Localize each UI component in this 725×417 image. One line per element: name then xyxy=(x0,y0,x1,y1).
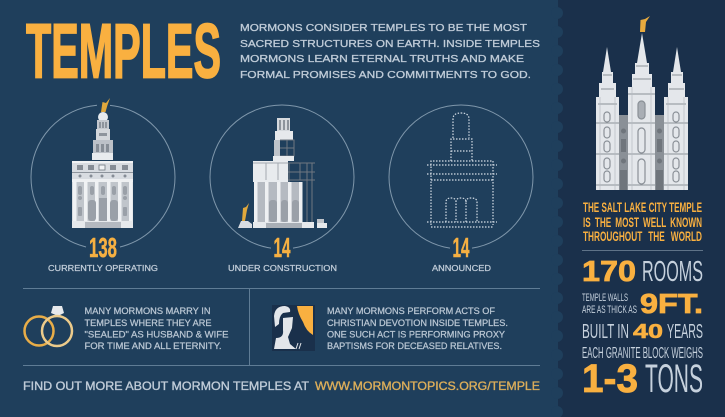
title: TEMPLES xyxy=(26,8,221,94)
text: baptisms: MANY MORMONS PERFORM ACTS OF xyxy=(327,306,496,316)
icon: wedding rings xyxy=(24,306,72,346)
intro text: MORMONS CONSIDER TEMPLES TO BE THE MOST xyxy=(240,22,528,34)
icon: dotted temple outline xyxy=(427,113,497,227)
intro text: FORMAL PROMISES AND COMMITMENTS TO GOD. xyxy=(240,69,531,81)
icon: Salt Lake City temple xyxy=(596,16,688,190)
stat: years built xyxy=(582,321,703,343)
stat: years built: 40 xyxy=(633,321,663,343)
count: 14 xyxy=(274,232,291,263)
panel: baptisms xyxy=(272,305,508,351)
stat: granite block weight xyxy=(582,345,703,401)
intro text: SACRED STRUCTURES ON EARTH. INSIDE TEMPLES xyxy=(240,38,540,50)
stat: granite block weight: 1-3 xyxy=(582,357,638,401)
sidebar stats xyxy=(582,256,703,401)
circle outline xyxy=(31,105,175,247)
stat: rooms xyxy=(582,256,703,288)
text: baptisms: CHRISTIAN DEVOTION INSIDE TEMPLES. xyxy=(327,318,508,328)
count: 138 xyxy=(89,232,117,263)
panel: currently operating xyxy=(31,98,175,273)
label: CURRENTLY OPERATING xyxy=(48,264,158,273)
footer call to action: WWW.MORMONTOPICS.ORG/TEMPLE xyxy=(315,379,540,393)
stat: rooms: 170 xyxy=(582,256,636,288)
stat: wall thickness: TEMPLE WALLS xyxy=(582,292,628,304)
stat: wall thickness xyxy=(582,288,703,319)
footer call to action xyxy=(23,379,540,393)
text: marriage xyxy=(84,306,228,351)
text: baptisms xyxy=(327,306,508,351)
panel: marriage xyxy=(24,306,228,351)
panel: announced xyxy=(389,105,533,273)
count: 14 xyxy=(452,232,470,263)
text: marriage: FOR TIME AND ALL ETERNITY. xyxy=(84,341,222,351)
label: ANNOUNCED xyxy=(432,264,491,273)
intro text: MORMONS LEARN ETERNAL TRUTHS AND MAKE xyxy=(240,53,524,65)
sidebar panel with scalloped edge xyxy=(551,0,725,417)
stat: wall thickness: 9FT. xyxy=(640,288,703,319)
text: baptisms: BAPTISMS FOR DECEASED RELATIVES. xyxy=(327,341,502,351)
stat: wall thickness: ARE AS THICK AS xyxy=(582,304,637,316)
text: marriage: TEMPLES WHERE THEY ARE xyxy=(84,318,212,328)
panel: under construction xyxy=(210,105,354,273)
circle outline xyxy=(389,105,533,248)
text: baptisms: ONE SUCH ACT IS PERFORMING PROXY xyxy=(327,330,505,340)
sidebar caption xyxy=(583,200,702,244)
icon: operating temple xyxy=(72,98,133,228)
text: marriage: "SEALED" AS HUSBAND & WIFE xyxy=(84,330,228,340)
intro text xyxy=(240,22,540,81)
text: marriage: MANY MORMONS MARRY IN xyxy=(84,306,210,316)
icon: Jesus portrait xyxy=(272,305,315,351)
circle outline xyxy=(210,105,354,248)
icon: temple under construction xyxy=(238,118,327,228)
footer call to action: FIND OUT MORE ABOUT MORMON TEMPLES AT xyxy=(23,379,310,393)
label: UNDER CONSTRUCTION xyxy=(228,264,337,273)
stat: years built: BUILT IN xyxy=(582,321,629,343)
